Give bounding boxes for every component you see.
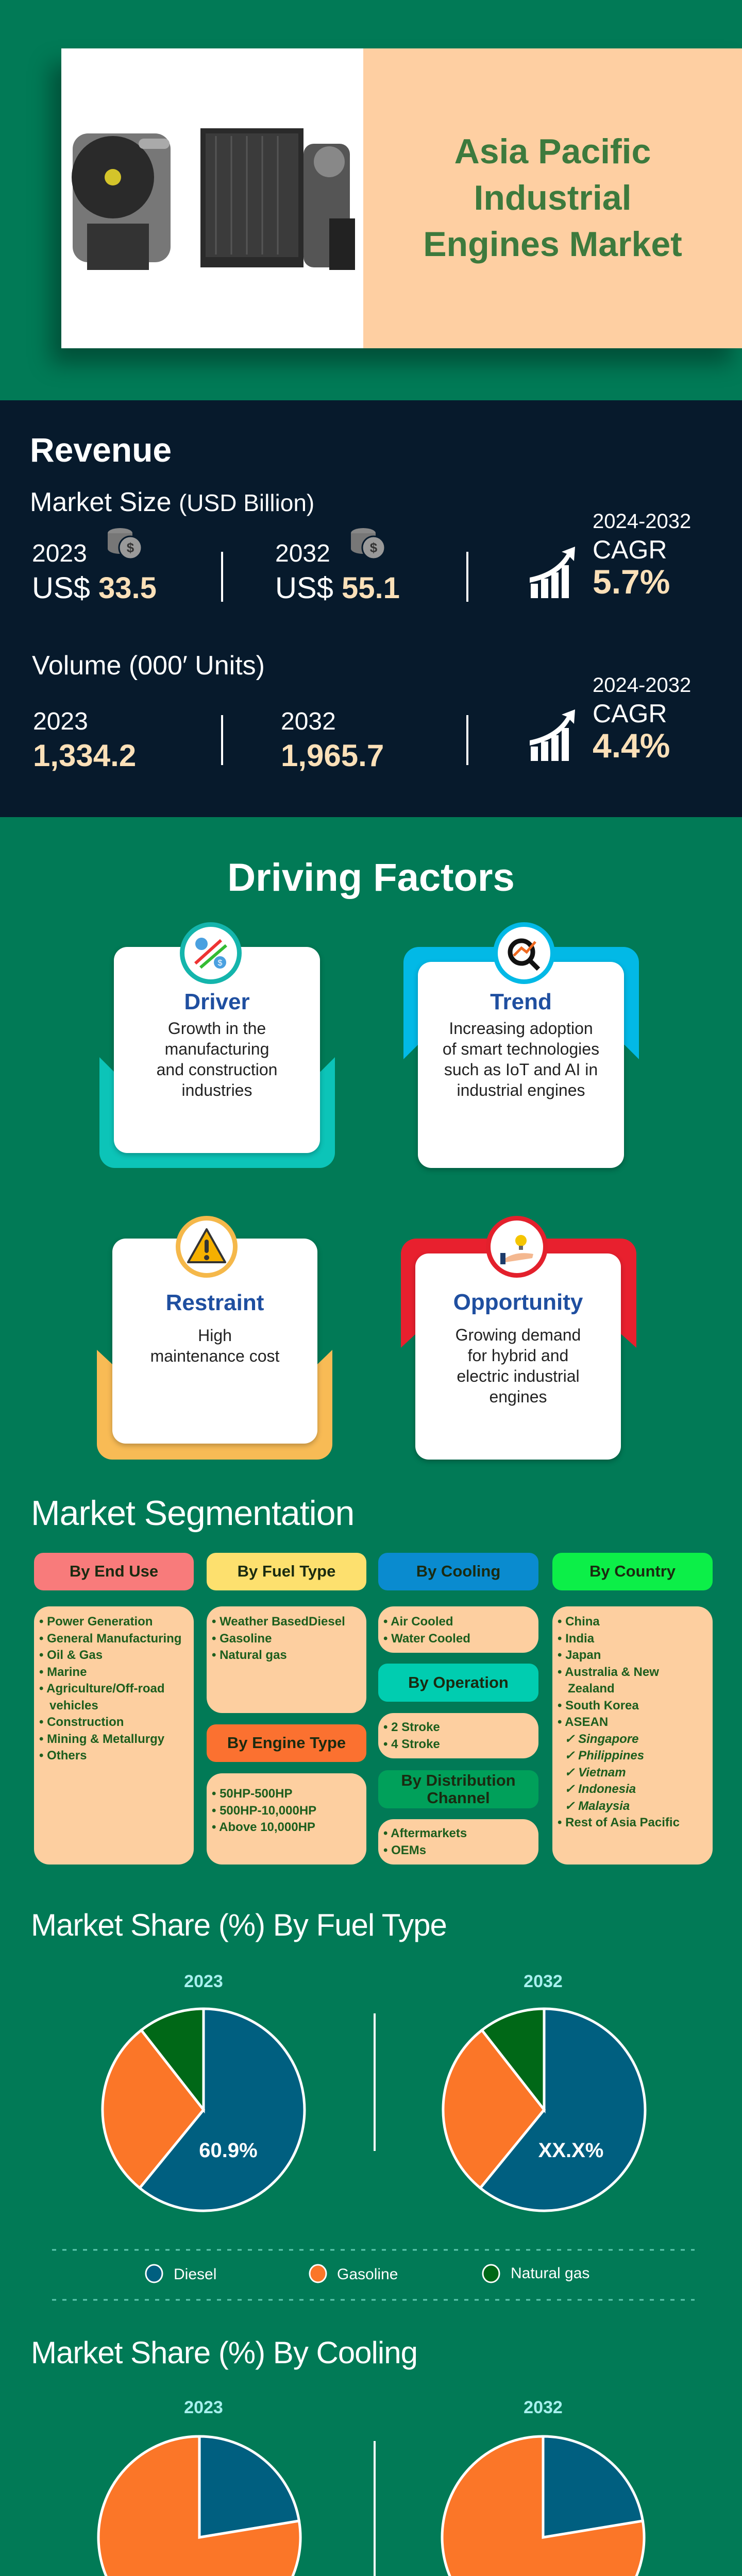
- panel: opportunity: electric industrial: [457, 1367, 580, 1385]
- list: end use: • Oil & Gas: [39, 1648, 103, 1662]
- list: fuel type: • Weather BasedDiesel: [212, 1615, 345, 1629]
- title: [423, 132, 682, 264]
- divider: [221, 552, 223, 602]
- header: by engine type: [207, 1724, 366, 1762]
- list: operation: • 4 Stroke: [383, 1737, 440, 1751]
- header: by country: [552, 1553, 713, 1590]
- panel: driver: manufacturing: [165, 1040, 269, 1058]
- panel: trend: [403, 922, 639, 1172]
- pie 2023: [98, 2436, 300, 2576]
- title: Industrial: [474, 178, 632, 217]
- list: fuel type: • Gasoline: [212, 1631, 272, 1646]
- panel: revenue: [0, 400, 742, 817]
- stat: revenue CAGR: [593, 510, 691, 601]
- stat: volume CAGR: 4.4%: [593, 726, 670, 765]
- panel: restraint: maintenance cost: [150, 1347, 279, 1365]
- panel: trend: Increasing adoption: [449, 1019, 593, 1038]
- stat: 2023 volume: 2023: [33, 708, 88, 735]
- title: Engines Market: [423, 225, 682, 264]
- list: engine type: • Above 10,000HP: [212, 1820, 315, 1834]
- panel: restraint: Restraint: [166, 1290, 264, 1315]
- list: cooling: • Water Cooled: [383, 1631, 470, 1646]
- divider: [466, 552, 468, 602]
- icon: coins: [351, 528, 384, 558]
- list: operation: • 2 Stroke: [383, 1720, 440, 1734]
- stat: volume CAGR: CAGR: [593, 699, 667, 728]
- text: market size label: Market Size (USD Billion): [30, 487, 314, 517]
- stat: revenue CAGR: 2024-2032: [593, 510, 691, 533]
- list: distribution: • Aftermarkets: [383, 1826, 467, 1840]
- icon: engines: [72, 128, 355, 270]
- title: Asia Pacific: [454, 132, 651, 171]
- header: by cooling: [378, 1553, 538, 1590]
- list: end use: • Agriculture/Off-road: [39, 1682, 165, 1696]
- legend: Natural gas: [511, 2265, 589, 2282]
- panel: driver: industries: [182, 1081, 252, 1099]
- panel: restraint: High: [198, 1326, 232, 1345]
- header: by operation: [378, 1664, 538, 1702]
- legend: Diesel: [174, 2266, 216, 2283]
- list: end use: • Power Generation: [39, 1615, 153, 1629]
- list: country: Zealand: [568, 1682, 615, 1696]
- stat: 2032 volume: 2032: [281, 708, 336, 735]
- list: country: • Australia & New: [558, 1665, 659, 1679]
- title panel: [363, 48, 742, 348]
- stat: 2032 value: 2032: [275, 540, 330, 567]
- panel: driver: and construction: [157, 1060, 277, 1079]
- stat: 2032 value: [275, 528, 400, 605]
- list: engine type: • 50HP-500HP: [212, 1787, 292, 1801]
- header: by end use: [34, 1553, 194, 1590]
- panel: driver: [99, 922, 335, 1168]
- header: by distribution channel: By Distribution: [401, 1771, 516, 1789]
- icon: trend: [493, 922, 555, 984]
- pie 2032: [443, 2009, 645, 2211]
- list: country: • Japan: [558, 1648, 601, 1662]
- list: country: • Rest of Asia Pacific: [558, 1816, 680, 1829]
- list: country: • South Korea: [558, 1698, 639, 1713]
- panel: restraint: [97, 1216, 332, 1460]
- panel: trend: such as IoT and AI in: [444, 1060, 598, 1079]
- stat: 2032 value: US$ 55.1: [275, 571, 400, 605]
- list: country: ✓ Indonesia: [564, 1782, 636, 1796]
- legend: Gasoline: [337, 2266, 398, 2283]
- list: country: • China: [558, 1615, 600, 1629]
- icon: driver: $: [218, 959, 223, 968]
- header: by end use: By End Use: [70, 1562, 158, 1580]
- stat: volume CAGR: [593, 674, 691, 765]
- list: fuel type: • Natural gas: [212, 1648, 287, 1662]
- list: cooling: [378, 1606, 538, 1653]
- heading: market segmentation: Market Segmentation: [31, 1494, 354, 1533]
- chart: cooling pies: 2023: [184, 2398, 223, 2417]
- pie 2023: 60.9%: [199, 2139, 258, 2162]
- heading: driving factors: Driving Factors: [227, 856, 515, 900]
- heading: revenue: Revenue: [30, 431, 172, 469]
- header: by cooling: By Cooling: [416, 1562, 500, 1580]
- header: by operation: By Operation: [408, 1673, 509, 1691]
- list: operation: [378, 1713, 538, 1758]
- header: by distribution channel: Channel: [427, 1789, 490, 1807]
- list: end use: • Marine: [39, 1665, 87, 1679]
- panel: trend: industrial engines: [457, 1081, 585, 1099]
- list: country: [552, 1606, 713, 1865]
- engine image panel: [61, 48, 363, 348]
- panel: trend: of smart technologies: [443, 1040, 599, 1058]
- header: by fuel type: By Fuel Type: [238, 1562, 335, 1580]
- chart: fuel type pies: 2032: [524, 1972, 563, 1991]
- icon: coins: [108, 528, 141, 558]
- chart: fuel type pies: 2023: [184, 1972, 223, 1991]
- list: distribution: [378, 1819, 538, 1865]
- text: volume label: Volume (000′ Units): [32, 651, 265, 681]
- list: country: ✓ Vietnam: [564, 1765, 626, 1780]
- panel: driver: Driver: [184, 989, 250, 1014]
- heading: market share by fuel type: Market Share (%) By Fuel Type: [31, 1908, 447, 1942]
- panel: segmentation: [34, 1553, 713, 1865]
- stat: 2023 volume: [33, 708, 136, 773]
- icon: growth chart: [530, 547, 575, 598]
- list: end use: • Mining & Metallurgy: [39, 1732, 164, 1745]
- stat: 2023 value: [32, 528, 157, 605]
- header: by fuel type: [207, 1553, 366, 1590]
- list: country: • ASEAN: [558, 1715, 608, 1729]
- list: end use: • Construction: [39, 1715, 124, 1729]
- icon: opportunity: [486, 1216, 548, 1278]
- list: end use: vehicles: [49, 1698, 98, 1713]
- list: country: ✓ Singapore: [564, 1732, 638, 1745]
- list: country: • India: [558, 1631, 594, 1646]
- list: end use: • Others: [39, 1749, 87, 1762]
- stat: revenue CAGR: CAGR: [593, 535, 667, 564]
- divider: [466, 715, 468, 765]
- header: by distribution channel: [378, 1770, 538, 1808]
- list: engine type: • 500HP-10,000HP: [212, 1803, 316, 1818]
- icon: coins: $: [370, 540, 378, 555]
- panel: opportunity: [401, 1216, 636, 1463]
- list: end use: • General Manufacturing: [39, 1631, 181, 1646]
- list: country: ✓ Malaysia: [564, 1799, 630, 1812]
- list: country: ✓ Philippines: [564, 1749, 644, 1762]
- stat: 2023 value: US$ 33.5: [32, 571, 157, 605]
- panel: opportunity: Growing demand: [456, 1326, 581, 1344]
- icon: driver: [180, 922, 242, 984]
- list: fuel type: [207, 1606, 366, 1713]
- chart: cooling pies: 2032: [524, 2398, 563, 2417]
- pie 2032: [442, 2436, 644, 2576]
- panel: driver: Growth in the: [168, 1019, 266, 1038]
- header: by country: By Country: [589, 1562, 676, 1580]
- header: by engine type: By Engine Type: [227, 1734, 346, 1752]
- icon: coins: $: [127, 540, 134, 555]
- panel: opportunity: engines: [489, 1387, 547, 1406]
- stat: 2032 volume: 1,965.7: [281, 738, 384, 773]
- list: end use: [34, 1606, 194, 1865]
- header card: [61, 48, 742, 348]
- list: cooling: • Air Cooled: [383, 1615, 453, 1629]
- legend: [146, 2265, 589, 2283]
- icon: warning: [176, 1216, 238, 1278]
- pie 2023: [103, 2009, 305, 2211]
- stat: 2032 volume: [281, 708, 384, 773]
- stat: revenue CAGR: 5.7%: [593, 563, 670, 601]
- panel: trend: Trend: [490, 989, 552, 1014]
- heading: market share by cooling: Market Share (%) By Cooling: [31, 2335, 417, 2370]
- icon: growth chart: [530, 709, 575, 761]
- chart: fuel type pies: [52, 1972, 695, 2301]
- list: distribution: • OEMs: [383, 1843, 426, 1857]
- stat: volume CAGR: 2024-2032: [593, 674, 691, 697]
- stat: 2023 value: 2023: [32, 540, 87, 567]
- divider: [221, 715, 223, 765]
- chart: cooling pies: [97, 2398, 646, 2576]
- panel: opportunity: for hybrid and: [468, 1346, 568, 1365]
- pie 2032: XX.X%: [538, 2139, 603, 2162]
- panel: opportunity: Opportunity: [453, 1290, 583, 1315]
- stat: 2023 volume: 1,334.2: [33, 738, 136, 773]
- list: engine type: [207, 1773, 366, 1865]
